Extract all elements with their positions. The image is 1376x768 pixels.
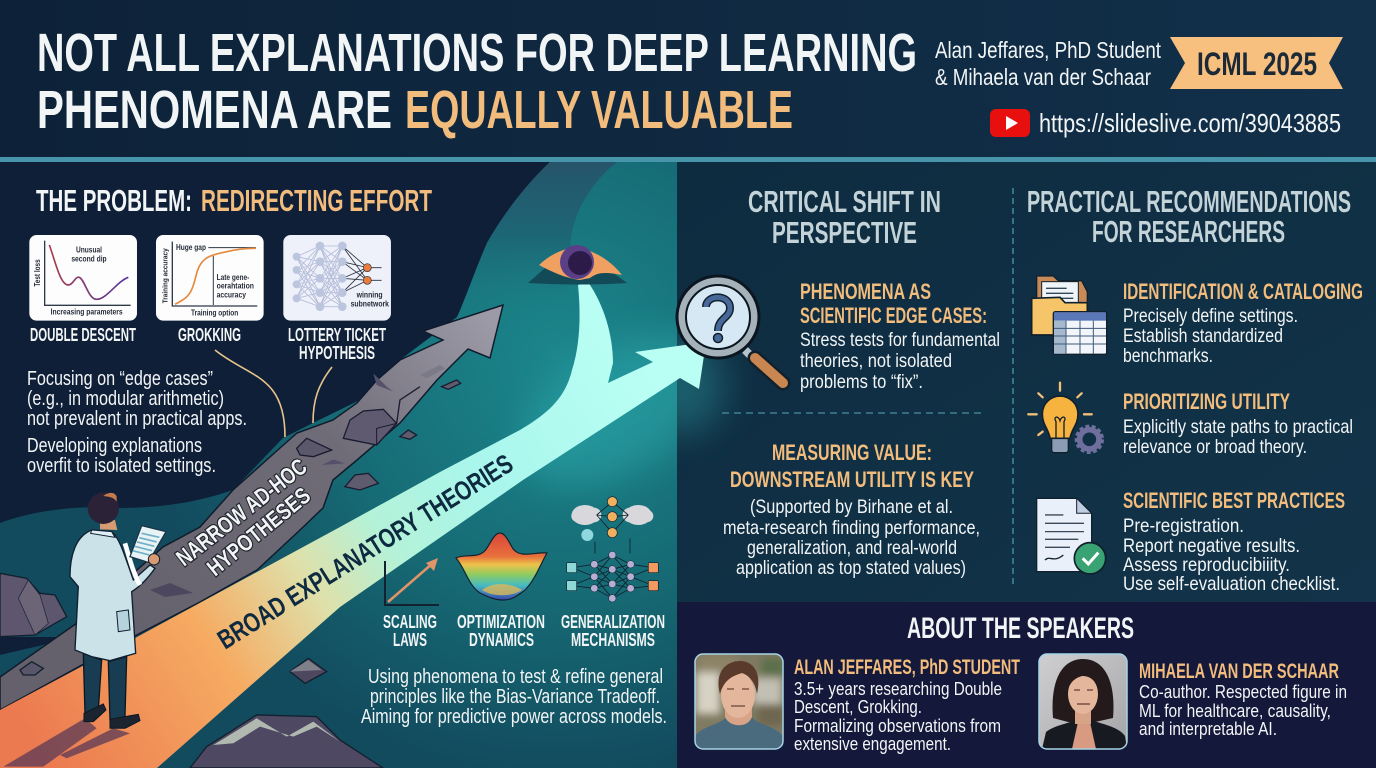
rocks: [0, 573, 383, 768]
icon: folder and table: [1032, 276, 1107, 354]
text block: theories description: [361, 666, 667, 728]
labels: three theory types: LAWS: [393, 630, 427, 650]
title: PHENOMENA ARE: [37, 80, 392, 140]
chart: grokking: Training accuracy: [160, 248, 169, 303]
labels: three theory types: GENERALIZATION: [561, 612, 665, 632]
chart: double descent: second dip: [71, 255, 107, 264]
title: NOT ALL EXPLANATIONS FOR DEEP LEARNING: [37, 23, 917, 83]
authors: & Mihaela van der Schaar: [935, 64, 1151, 90]
label: narrow ad-hoc hypotheses: [171, 453, 315, 581]
text block: scientific best practices: Assess reproducibiiity.: [1123, 554, 1290, 576]
text block: prioritizing utility: relevance or broad theory.: [1123, 436, 1307, 458]
label: double descent: DOUBLE DESCENT: [30, 325, 136, 345]
photo: Mihaela van der Schaar: [1039, 654, 1127, 749]
panel: the problem (left illustration): [0, 162, 745, 768]
text block: phenomena as edge cases: SCIENTIFIC EDGE CASES:: [800, 303, 987, 328]
label: broad explanatory theories: BROAD EXPLANATORY THEORIES: [212, 448, 518, 655]
labels: three theory types: SCALING: [383, 612, 437, 632]
text block: Mihaela van der Schaar: [1139, 660, 1347, 739]
text block: Alan Jeffares: [794, 656, 1020, 754]
labels: three theory types: [383, 612, 665, 650]
title: [37, 23, 917, 140]
text block: Alan Jeffares: ALAN JEFFARES, PhD STUDENT: [794, 656, 1020, 679]
text block: measuring value: generalization, and real-world: [747, 537, 957, 559]
panel: practical recommendations: [1027, 184, 1363, 595]
figure: scientist with tablet: [3, 493, 166, 767]
chart: lottery ticket network: [283, 235, 391, 321]
text block: phenomena as edge cases: theories, not isolated: [800, 350, 952, 372]
text block: scientific best practices: [1123, 488, 1345, 595]
authors: Alan Jeffares, PhD Student: [935, 37, 1161, 63]
labels: three theory types: DYNAMICS: [469, 630, 534, 650]
text block: measuring value: MEASURING VALUE:: [772, 440, 932, 465]
arrow: broad explanatory theories path: [0, 282, 706, 768]
label: narrow ad-hoc hypotheses: NARROW AD-HOC: [171, 453, 312, 571]
heading: critical shift: CRITICAL SHIFT IN: [748, 184, 941, 219]
chart: grokking: [156, 235, 264, 321]
right panel background: [677, 162, 1376, 602]
text block: prioritizing utility: [1123, 389, 1353, 458]
text block: problem description: (e.g., in modular arithmetic): [27, 388, 224, 410]
text block: problem description: Developing explanations: [27, 435, 202, 457]
text block: measuring value: application as top stated values): [736, 557, 966, 579]
text block: measuring value: meta-research finding performance,: [723, 517, 980, 539]
chart: lottery ticket network: subnetwork: [351, 299, 389, 308]
text block: measuring value: (Supported by Birhane et al.: [750, 496, 953, 518]
panel: critical shift in perspective: [677, 184, 1000, 579]
label: grokking: GROKKING: [178, 325, 241, 345]
icon: light bulb and gear: [1028, 383, 1102, 453]
chart: lottery ticket network: winning: [356, 290, 383, 299]
chart: grokking: Late gene-: [217, 273, 250, 282]
text block: phenomena as edge cases: Stress tests for fundamental: [800, 329, 1000, 351]
label: lottery ticket hypothesis: HYPOTHESIS: [299, 343, 375, 363]
text block: problem description: overfit to isolated settings.: [27, 455, 216, 477]
title: EQUALLY VALUABLE: [405, 80, 793, 140]
text block: problem description: [27, 368, 247, 477]
chart: grokking: Training option: [191, 308, 238, 317]
chart: double descent: Test loss: [33, 259, 42, 287]
text block: prioritizing utility: PRIORITIZING UTILITY: [1123, 389, 1290, 414]
text block: Alan Jeffares: Descent, Grokking.: [794, 696, 922, 717]
text block: Alan Jeffares: extensive engagement.: [794, 733, 951, 754]
text block: phenomena as edge cases: PHENOMENA AS: [800, 279, 931, 304]
photo: Alan Jeffares: [695, 654, 784, 749]
labels: three theory types: MECHANISMS: [571, 630, 655, 650]
text block: phenomena as edge cases: [800, 279, 1000, 393]
text block: theories description: principles like the Bias-Variance Tradeoff.: [370, 686, 660, 708]
text block: identification and cataloging: Precisely define settings.: [1123, 305, 1298, 327]
text block: measuring value: DOWNSTREAM UTILITY IS KEY: [730, 467, 974, 492]
heading: critical shift: PERSPECTIVE: [772, 215, 917, 250]
badge: ICML 2025: [1170, 37, 1343, 89]
heading: critical shift: [748, 184, 941, 250]
header band: [0, 0, 1376, 162]
label: narrow ad-hoc hypotheses: HYPOTHESES: [202, 482, 315, 581]
authors: [935, 37, 1161, 90]
text block: identification and cataloging: Establish standardized: [1123, 325, 1283, 347]
heading: the problem: THE PROBLEM:: [36, 183, 192, 218]
icon: eye: [528, 245, 627, 284]
chart: grokking: oerahtation: [217, 282, 254, 291]
chart: double descent: [29, 235, 137, 321]
text block: Alan Jeffares: 3.5+ years researching Double: [794, 678, 1002, 699]
text block: Mihaela van der Schaar: and interpretable AI.: [1139, 718, 1277, 739]
text block: Mihaela van der Schaar: ML for healthcare, causality,: [1139, 700, 1331, 721]
icon: magnifying glass: [677, 276, 783, 383]
badge: ICML 2025: ICML 2025: [1197, 46, 1317, 82]
label: lottery ticket hypothesis: LOTTERY TICKET: [288, 325, 386, 345]
panel: about the speakers: [677, 602, 1376, 768]
text block: phenomena as edge cases: problems to “fix”.: [800, 371, 923, 393]
text block: Alan Jeffares: Formalizing observations from: [794, 715, 1001, 736]
text block: scientific best practices: Pre-registration.: [1123, 515, 1244, 537]
heading: recommendations: [1027, 184, 1351, 249]
heading: about the speakers: ABOUT THE SPEAKERS: [907, 612, 1134, 645]
text block: problem description: not prevalent in practical apps.: [27, 408, 247, 430]
text block: problem description: Focusing on “edge cases”: [27, 368, 213, 390]
labels: three theory types: OPTIMIZATION: [457, 612, 545, 632]
connector lines: [215, 350, 332, 437]
text block: theories description: Using phenomena to test & refine general: [368, 666, 663, 688]
text block: scientific best practices: Report negative results.: [1123, 535, 1300, 557]
heading: the problem: REDIRECTING EFFORT: [201, 183, 432, 218]
chart: grokking: Huge gap: [176, 243, 206, 252]
arrow: narrow ad-hoc hypotheses path: [0, 305, 503, 710]
chart: grokking: accuracy: [217, 290, 246, 299]
text block: measuring value: [723, 440, 980, 579]
text block: identification and cataloging: [1123, 279, 1363, 367]
icon: optimization surface: [456, 533, 547, 600]
label: lottery ticket hypothesis: [288, 325, 386, 363]
heading: the problem: [36, 183, 432, 218]
text block: theories description: Aiming for predictive power across models.: [361, 706, 667, 728]
icon: generalization network: [567, 497, 658, 602]
chart: double descent: Unusual: [76, 246, 102, 255]
text block: scientific best practices: Use self-evaluation checklist.: [1123, 573, 1340, 595]
chart: double descent: Increasing parameters: [51, 308, 123, 317]
icon: scaling laws: [385, 558, 439, 605]
icon: document with check: [1037, 498, 1106, 574]
text block: identification and cataloging: benchmarks.: [1123, 345, 1213, 367]
